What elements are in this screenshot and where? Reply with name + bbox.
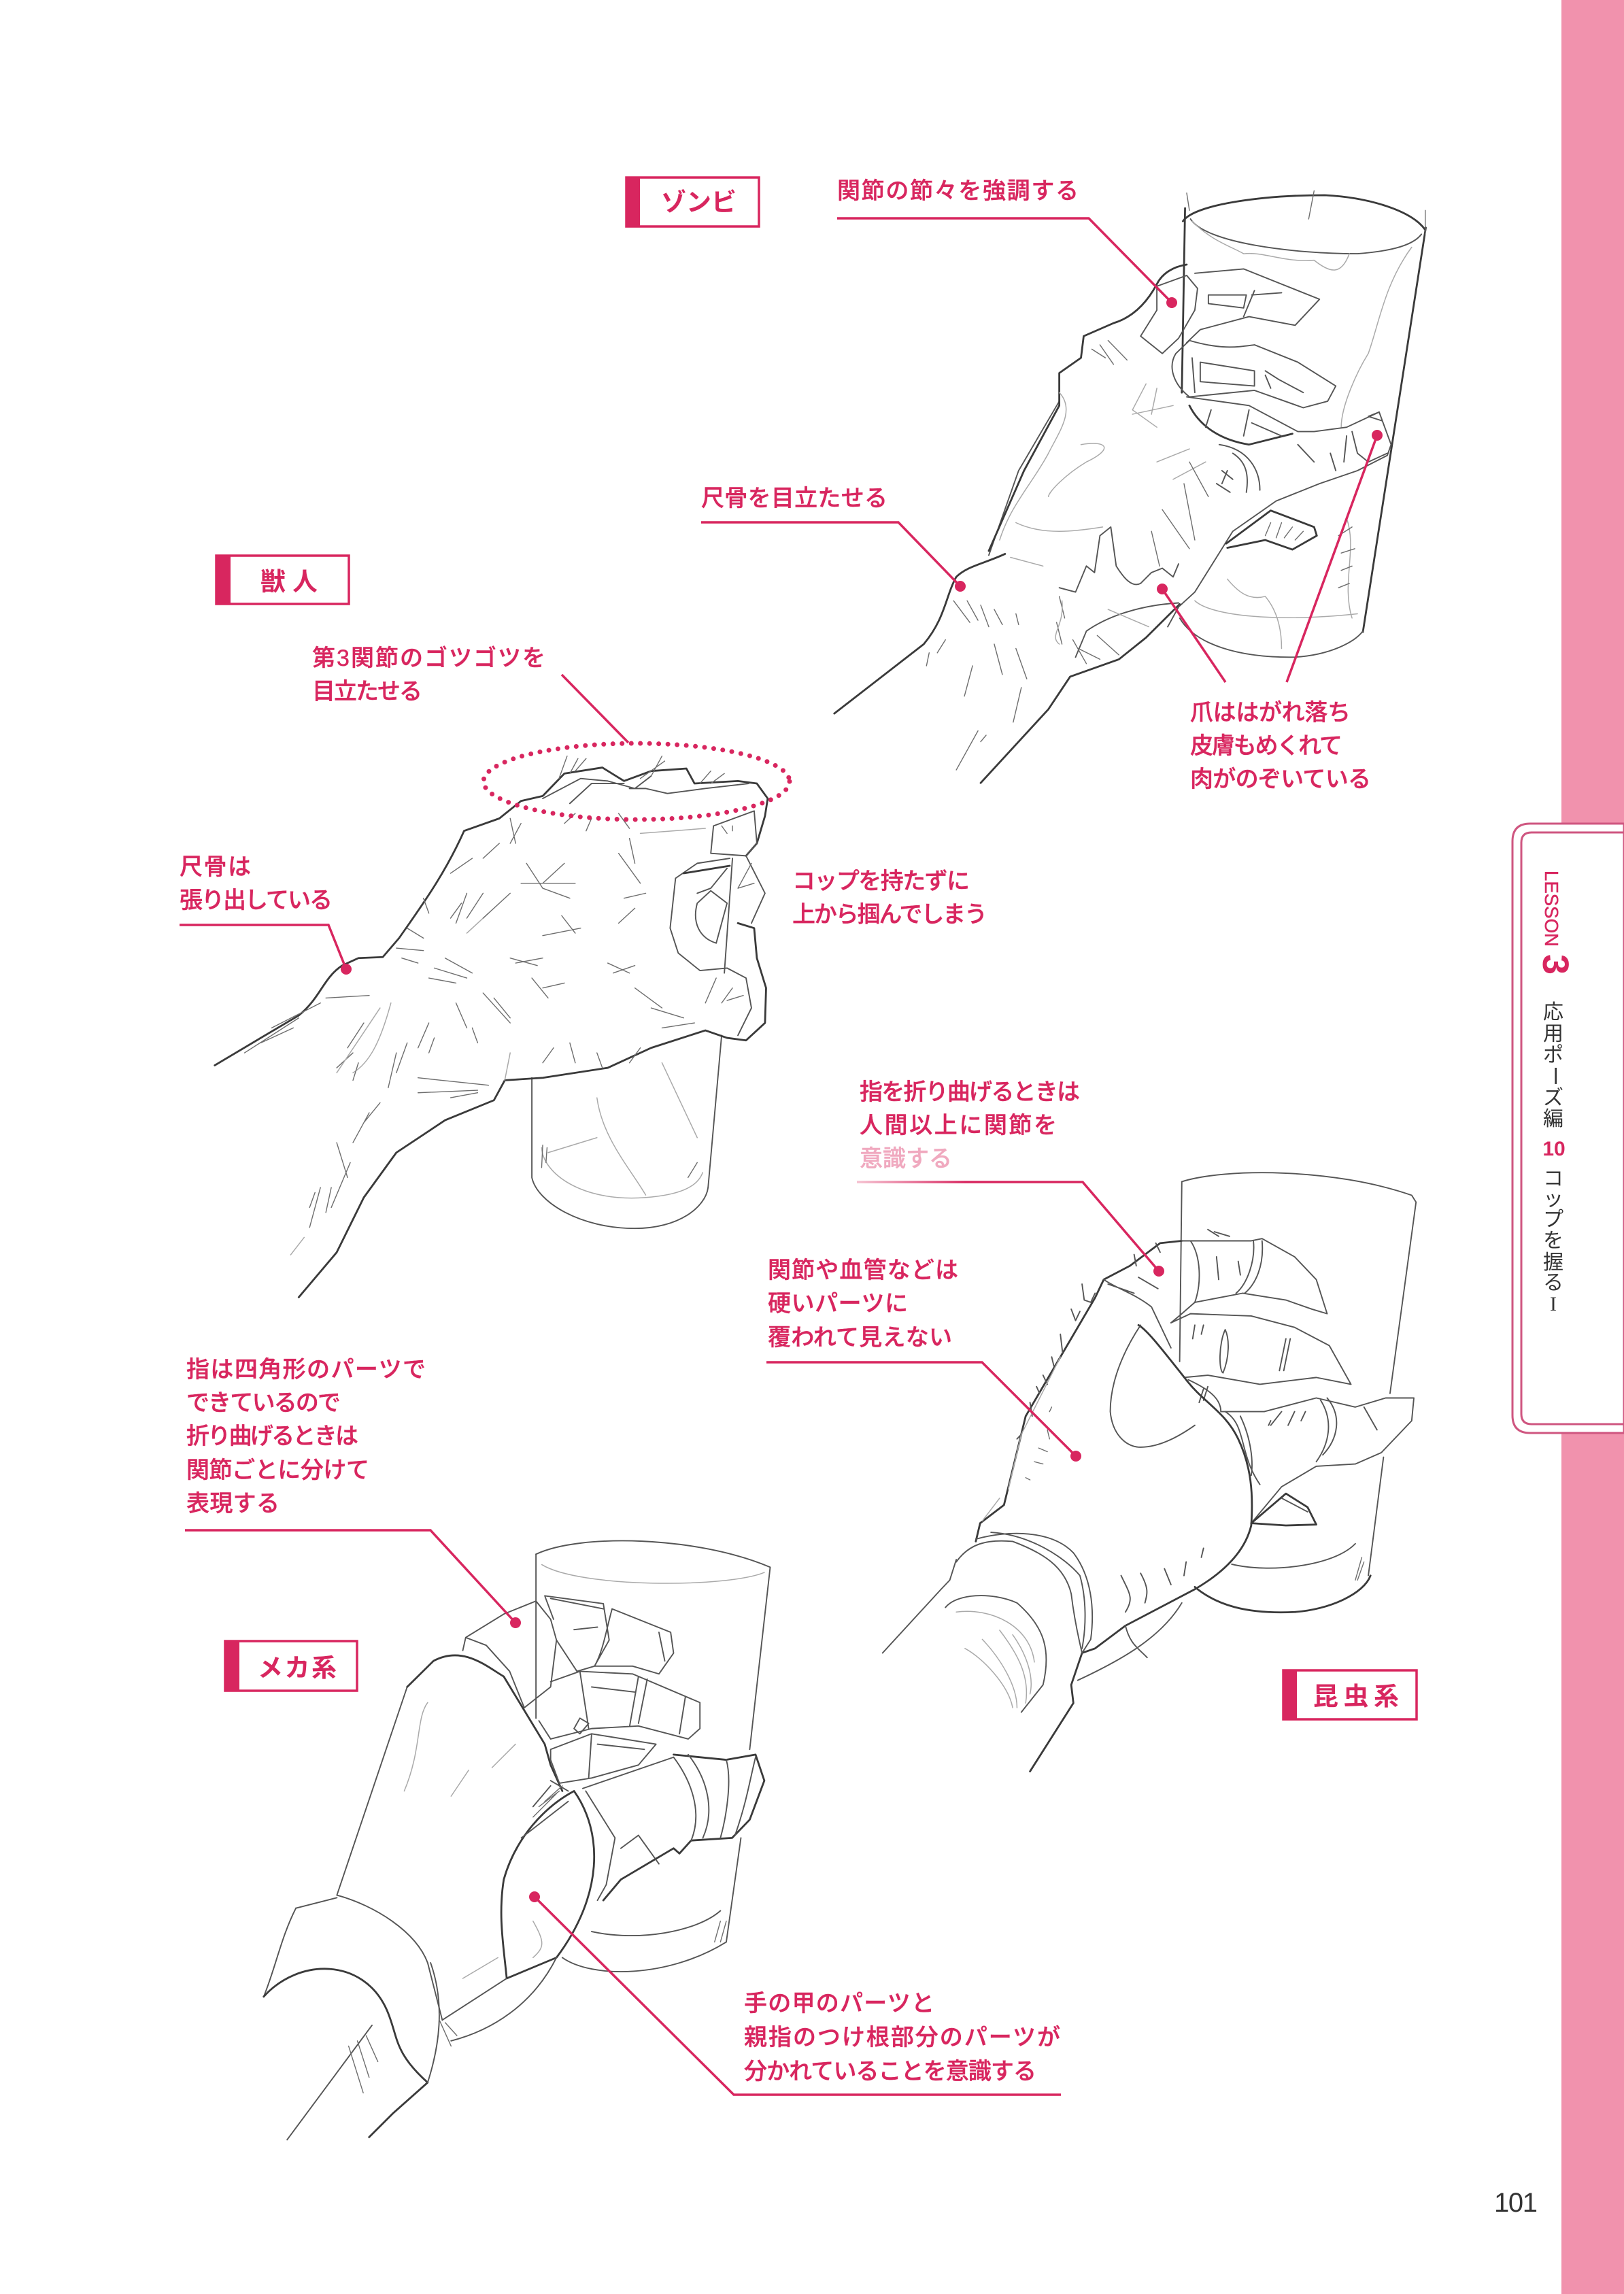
callout: be aware of joints when bending fingers [857, 1079, 1164, 1277]
callout: grabs from above instead of holding [792, 868, 987, 928]
side tab: lesson index: プ [1543, 1209, 1563, 1231]
callout: grabs from above instead of holding: コップを持たずに [792, 868, 970, 894]
side tab: lesson index: LESSON [1541, 871, 1562, 947]
side tab: lesson index: ッ [1543, 1188, 1563, 1211]
callout: back of hand and thumb base are separate parts [529, 1891, 1061, 2095]
callout: nails fall off, skin peels: 肉がのぞいている [1190, 766, 1371, 792]
callout: back of hand and thumb base are separate parts: 親指のつけ根部分のパーツが [744, 2025, 1060, 2051]
side tab: lesson index: 10 [1542, 1138, 1566, 1160]
tag: mecha type [224, 1640, 357, 1691]
side tab: lesson index: 握 [1543, 1251, 1563, 1274]
tag: insect type [1283, 1670, 1417, 1720]
callout: joints and veins hidden by hard parts: 関節や血管などは [768, 1258, 958, 1283]
callout: ulna protrudes: 尺骨は [180, 854, 251, 880]
side tab: lesson index: 3 [1535, 954, 1576, 975]
side tab: lesson index: I [1550, 1293, 1557, 1315]
side tab: lesson index: を [1543, 1230, 1563, 1252]
tag: beast-man [216, 555, 349, 605]
tag: mecha type: メカ系 [258, 1654, 337, 1682]
callout: joints and veins hidden by hard parts: 硬いパーツに [768, 1291, 908, 1317]
drawing: zombie hand holding a glass [834, 191, 1426, 783]
callout: grabs from above instead of holding: 上から掴んでしまう [792, 902, 987, 928]
callout: emphasize third joint knuckles [312, 645, 790, 820]
callout: back of hand and thumb base are separate parts: 手の甲のパーツと [744, 1991, 934, 2017]
side tab: lesson index: ー [1543, 1066, 1566, 1086]
side tab: lesson index: ポ [1543, 1044, 1563, 1066]
callout: ulna protrudes [180, 854, 352, 975]
side tab: lesson index: 編 [1543, 1108, 1563, 1130]
drawing: mecha hand holding a glass [264, 1540, 771, 2140]
side tab: lesson index: 応 [1543, 1001, 1563, 1024]
drawing: beast-man hand gripping the glass from above [215, 756, 768, 1297]
callout: fingers made of square parts: 表現する [186, 1491, 280, 1517]
callout: nails fall off, skin peels: 皮膚もめくれて [1190, 733, 1342, 759]
callout: be aware of joints when bending fingers: 指を折り曲げるときは [860, 1079, 1080, 1105]
callout: emphasize knuckle joints [837, 178, 1177, 308]
tag: zombie: ゾンビ [661, 188, 737, 216]
tag: beast-man: 獣人 [260, 568, 318, 596]
callout: joints and veins hidden by hard parts [766, 1258, 1081, 1462]
callout: fingers made of square parts: 指は四角形のパーツで [186, 1357, 426, 1383]
callout: emphasize third joint knuckles: 目立たせる [312, 679, 422, 705]
callout: joints and veins hidden by hard parts: 覆われて見えない [768, 1325, 952, 1351]
page number: 101 [1494, 2188, 1538, 2218]
side tab: lesson index [1512, 824, 1624, 1433]
callout: nails fall off, skin peels: 爪ははがれ落ち [1190, 700, 1351, 726]
callout: be aware of joints when bending fingers: 意識する [860, 1146, 952, 1172]
pink side strip [1561, 0, 1624, 2294]
side tab: lesson index: 用 [1543, 1023, 1563, 1045]
callout: fingers made of square parts: 関節ごとに分けて [186, 1457, 369, 1483]
drawing: insect-type hand holding a glass [883, 1173, 1416, 1772]
callout: back of hand and thumb base are separate parts: 分かれていることを意識する [744, 2059, 1036, 2085]
callout: emphasize ulna: 尺骨を目立たせる [701, 486, 887, 511]
callout: fingers made of square parts [185, 1357, 521, 1628]
callout: ulna protrudes: 張り出している [180, 888, 333, 913]
callout: emphasize knuckle joints: 関節の節々を強調する [837, 178, 1079, 204]
tag: zombie [626, 177, 759, 227]
side tab: lesson index: コ [1543, 1168, 1563, 1190]
callout: emphasize third joint knuckles: 第3関節のゴツゴツを [312, 645, 545, 671]
callout: nails fall off, skin peels [1157, 430, 1383, 792]
side tab: lesson index: る [1543, 1272, 1563, 1294]
tag: insect type: 昆虫系 [1313, 1683, 1399, 1710]
callout: fingers made of square parts: できているので [186, 1390, 341, 1416]
side tab: lesson index: ズ [1543, 1087, 1563, 1109]
callout: emphasize ulna [701, 486, 966, 592]
callout: fingers made of square parts: 折り曲げるときは [186, 1423, 358, 1449]
callout: be aware of joints when bending fingers: 人間以上に関節を [860, 1113, 1057, 1138]
